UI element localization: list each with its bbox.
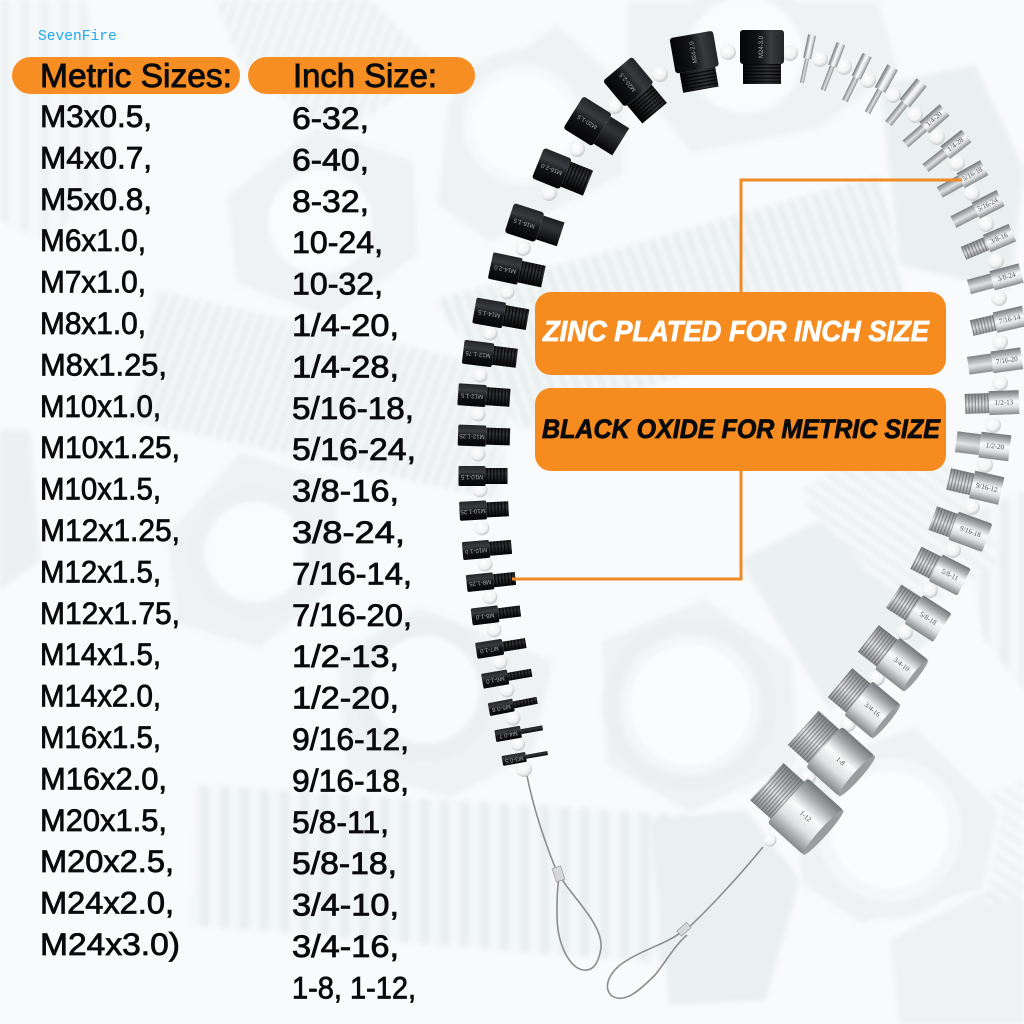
inch sizes list: 5/8-11,: [292, 804, 389, 840]
connector arrow: black oxide to metric adapters: [512, 470, 741, 579]
black oxide metric adapters: M10-1.25: [460, 507, 486, 514]
left mid stub: [0, 430, 40, 590]
connector arrow: zinc plated to inch adapters: [741, 180, 962, 293]
inch sizes list: 5/16-24,: [292, 431, 416, 467]
inch sizes list: 3/4-16,: [292, 928, 399, 964]
metric sizes list: M20x1.5,: [40, 802, 167, 838]
inch sizes list: 6-32,: [292, 100, 369, 136]
metric sizes list: M12x1.5,: [40, 553, 161, 589]
chain beads: [470, 44, 1008, 846]
black oxide metric adapters: M3-0.5: [504, 754, 524, 764]
zinc plated inch adapters: 1/4-20: [925, 110, 944, 128]
metric sizes list: M16x2.0,: [40, 760, 167, 796]
nut top right: [625, 0, 900, 155]
inch sizes list: 7/16-14,: [292, 555, 412, 591]
zinc plated inch adapters: 1-12: [798, 809, 813, 824]
callout: zinc plated for inch size: [535, 292, 946, 375]
metric sizes list: M14x1.5,: [40, 636, 161, 672]
upper diagonal bolt: [215, 0, 440, 140]
inch sizes list: 1-8, 1-12,: [292, 969, 416, 1005]
zinc plated inch adapters: 5/8-11: [940, 567, 960, 583]
zinc plated inch adapters: 5/16-18: [961, 165, 984, 183]
callout: black oxide for metric size: BLACK OXIDE FOR METRIC SIZE: [542, 414, 941, 444]
inch sizes list: 3/4-10,: [292, 887, 399, 923]
metric sizes list: M10x1.0,: [40, 388, 161, 424]
black oxide metric adapters: M12-1.75: [464, 349, 491, 358]
metric sizes list: M12x1.75,: [40, 595, 180, 631]
metric sizes list: M3x0.5,: [40, 98, 152, 134]
inch sizes list: 3/8-24,: [292, 514, 405, 550]
black oxide metric adapters: M16-2.0: [540, 161, 563, 175]
black oxide metric adapters: M6-1.0: [485, 675, 505, 684]
metric sizes list: M20x2.5,: [40, 843, 174, 879]
nut big lower-right: [790, 725, 1000, 925]
black oxide metric adapters: M12-1.25: [459, 432, 485, 439]
middle bolt: [130, 290, 510, 500]
inch sizes list: 8-32,: [292, 183, 369, 219]
nut lower left: [165, 450, 345, 650]
black oxide metric adapters: M7-1.0: [479, 644, 499, 653]
black oxide metric adapters: M20-2.5: [618, 71, 638, 92]
nut lower middle: [335, 605, 555, 800]
inch sizes list: 1/4-28,: [292, 348, 399, 384]
nut big centre-right: [600, 597, 798, 815]
black oxide metric adapters: M24-3.0: [759, 35, 765, 58]
black oxide metric adapters: M12-1.5: [460, 391, 483, 399]
metric sizes list: M24x2.0,: [40, 885, 174, 921]
inch sizes list: 10-24,: [292, 224, 383, 260]
inch sizes list: 1/2-20,: [292, 680, 399, 716]
inch sizes list: 6-40,: [292, 141, 369, 177]
metric sizes list: M10x1.25,: [40, 429, 180, 465]
black oxide metric adapters: M10-1.0: [464, 546, 487, 554]
black oxide metric adapters: M8-1.0: [475, 611, 495, 620]
bottom-right bolt: [890, 870, 1024, 1024]
metric sizes list: M14x2.0,: [40, 678, 161, 714]
right wire loop: [607, 847, 763, 998]
nut mid-left: [225, 125, 420, 320]
black oxide metric adapters: M16-1.5: [513, 216, 536, 229]
inch sizes list: 10-32,: [292, 266, 383, 302]
metric sizes list: M8x1.25,: [40, 346, 167, 382]
inch sizes list: 9/16-12,: [292, 721, 409, 757]
upper-right bolt thread: [435, 175, 905, 430]
left wire loop: [527, 776, 601, 970]
upper-right bolt head: [880, 65, 1024, 290]
zinc plated inch adapters: 1/4-28: [946, 136, 966, 153]
black oxide metric adapters: M24-2.0: [689, 40, 699, 64]
inch sizes list: 9/16-18,: [292, 762, 409, 798]
black oxide metric adapters: M5-0.8: [491, 703, 511, 712]
zinc plated inch adapters: 9/16-12: [975, 481, 999, 494]
black oxide metric adapters: [457, 30, 784, 766]
inch sizes list: 5/16-18,: [292, 390, 414, 426]
inch sizes list: 7/16-20,: [292, 597, 412, 633]
metric sizes list: M6x1.0,: [40, 222, 146, 258]
bottom horizontal bolt: [190, 785, 690, 965]
metric sizes list: M8x1.0,: [40, 305, 146, 341]
zinc plated inch adapters: 7/16-20: [996, 355, 1019, 366]
zinc plated inch adapters: 1-8: [834, 755, 847, 768]
right bolt: [960, 490, 1024, 690]
black oxide metric adapters: M20-1.5: [576, 112, 599, 130]
black oxide metric adapters: M8-1.25: [468, 578, 491, 586]
metric sizes list: [40, 98, 180, 962]
zinc plated inch adapters: 3/8-24: [997, 271, 1017, 283]
inch sizes list: 1/2-13,: [292, 638, 399, 674]
far-left bolt: [0, 0, 120, 240]
zinc plated inch adapters: [747, 34, 1024, 857]
metric sizes list: M5x0.8,: [40, 181, 152, 217]
inch sizes list: [292, 100, 416, 1005]
watermark: SevenFire: SevenFire: [38, 29, 117, 45]
inch size header pill: Inch Size:: [293, 57, 437, 94]
zinc plated inch adapters: 3/8-16: [989, 231, 1009, 246]
black oxide metric adapters: M4-0.7: [498, 729, 518, 739]
callout: zinc plated for inch size: ZINC PLATED FOR INCH SIZE: [542, 316, 931, 348]
lower-right diagonal bolt: [800, 420, 1000, 640]
black oxide metric adapters: M14-1.5: [477, 308, 501, 318]
metric sizes header pill: Metric Sizes:: [40, 57, 232, 94]
inch sizes list: 3/8-16,: [292, 473, 399, 509]
bottom bolt head: [650, 810, 800, 1005]
metric sizes list: M10x1.5,: [40, 471, 161, 507]
zinc plated inch adapters: 5/16-24: [976, 196, 1000, 213]
zinc plated inch adapters: 5/8-18: [918, 610, 938, 627]
metric sizes list: M16x1.5,: [40, 719, 161, 755]
zinc plated inch adapters: 7/16-14: [998, 313, 1022, 326]
metric sizes list: M7x1.0,: [40, 264, 146, 300]
black oxide metric adapters: M10-1.5: [460, 473, 483, 479]
callout: black oxide for metric size: [535, 388, 946, 471]
metric sizes list: M4x0.7,: [40, 140, 152, 176]
inch sizes list: 1/4-20,: [292, 307, 399, 343]
metric sizes list: M12x1.25,: [40, 512, 180, 548]
zinc plated inch adapters: 3/4-10: [892, 656, 912, 673]
zinc plated inch adapters: 1/2-20: [985, 441, 1005, 452]
inch sizes list: 5/8-18,: [292, 845, 397, 881]
metric sizes list: M24x3.0): [40, 926, 180, 962]
nut top centre: [435, 22, 625, 245]
zinc plated inch adapters: 3/4-16: [863, 701, 882, 719]
black oxide metric adapters: M14-2.0: [493, 263, 517, 274]
zinc plated inch adapters: 9/16-18: [959, 524, 982, 539]
inch size header pill: [248, 57, 475, 94]
zinc plated inch adapters: 1/2-13: [995, 398, 1014, 407]
